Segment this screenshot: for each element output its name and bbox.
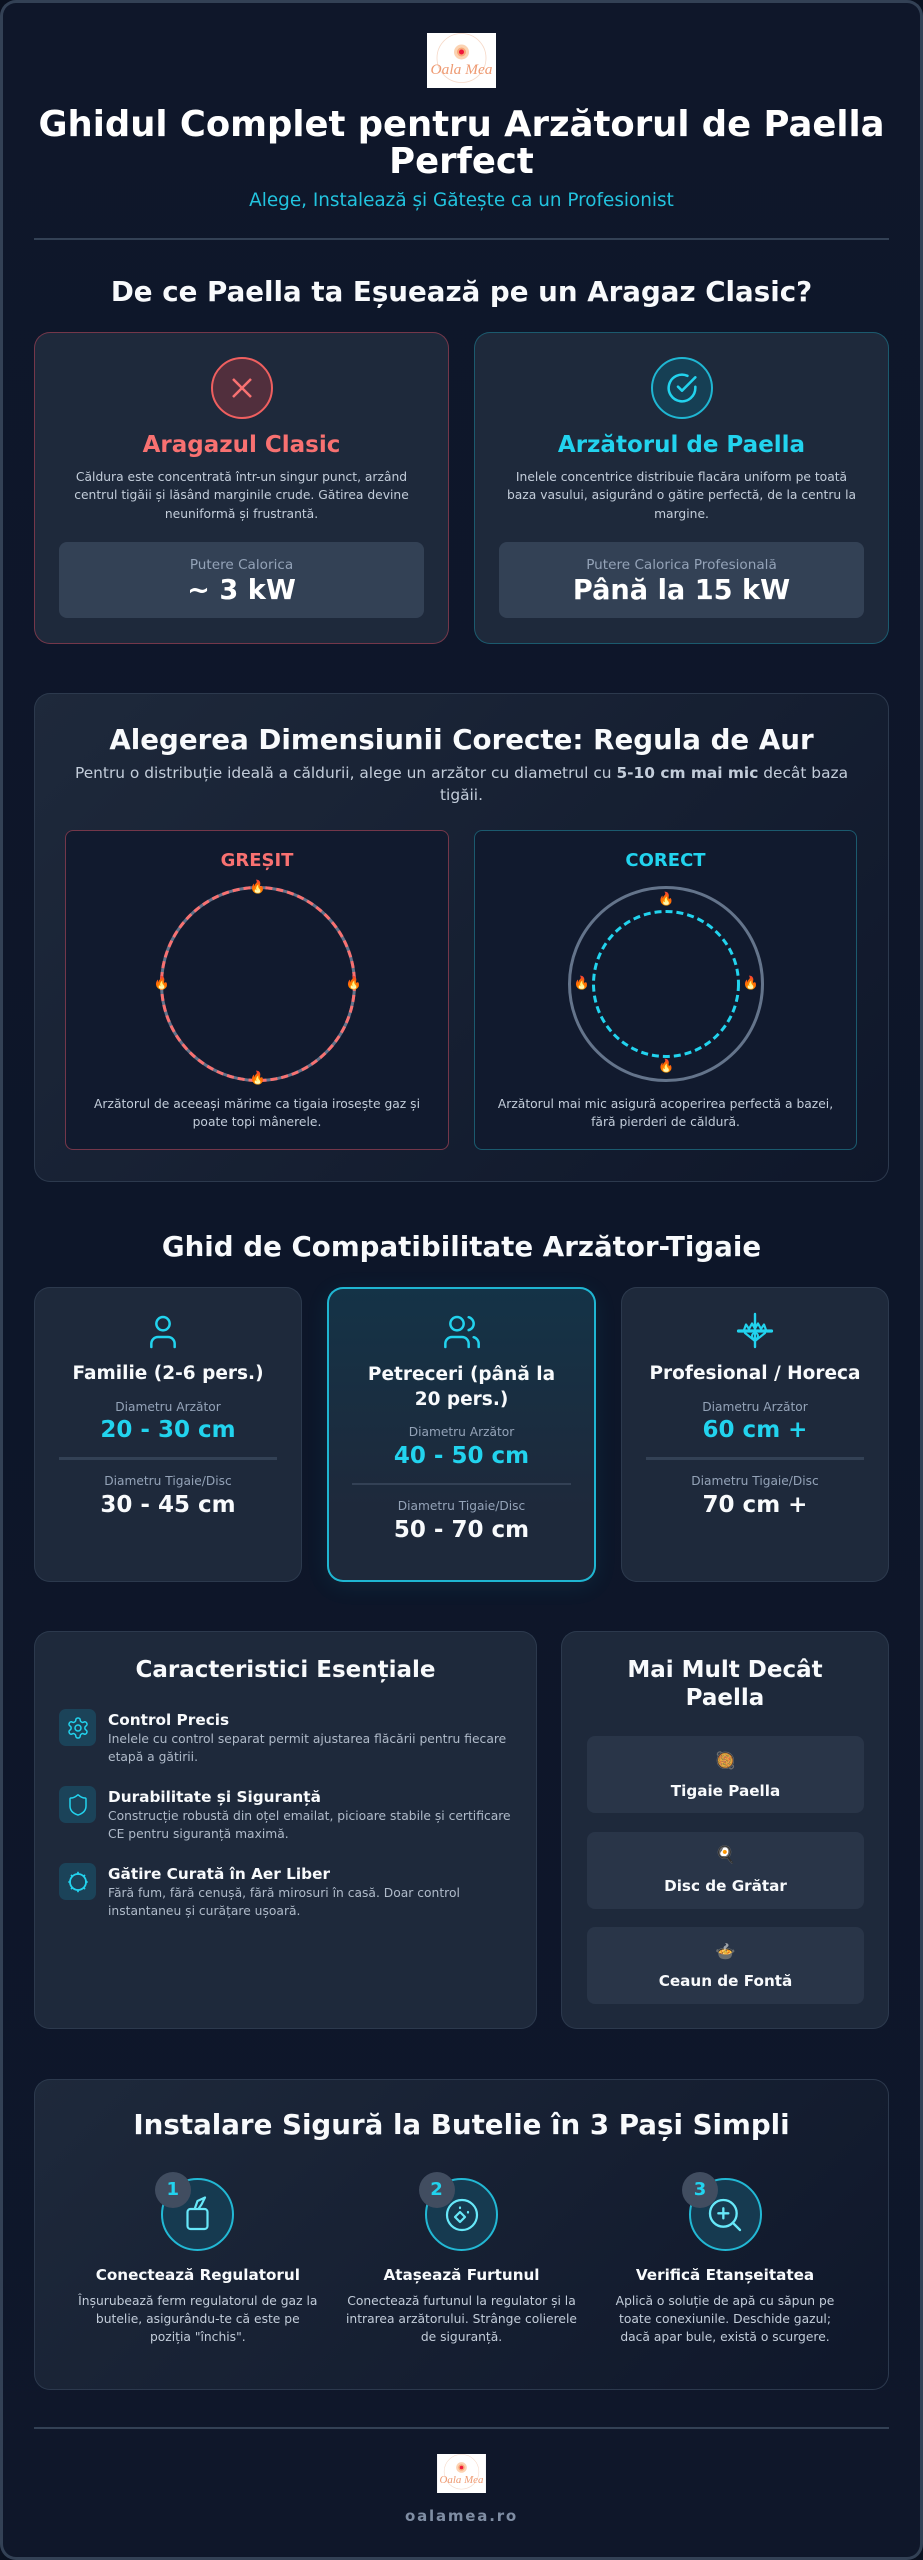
text: golden rule: Pentru o distribuție ideală a căldurii, alege un arzător cu diametrul cu 5-10 cm mai mic decât baza bbox=[75, 764, 848, 782]
diagram: same size burner: 🔥 bbox=[250, 1071, 265, 1086]
diagram: smaller burner: 🔥 bbox=[658, 1059, 674, 1074]
heading: compatibility guide: Ghid de Compatibilitate Arzător-Tigaie bbox=[162, 1230, 761, 1263]
description: classic stove bbox=[74, 470, 409, 521]
icon: shield bbox=[59, 1786, 96, 1823]
caption: correct bbox=[498, 1096, 833, 1129]
step text bbox=[346, 2294, 577, 2344]
logo: Oala Mea bbox=[427, 33, 496, 88]
feature text: durability bbox=[108, 1809, 511, 1841]
step title: Atașează Furtunul bbox=[383, 2266, 540, 2284]
logo: Oala Mea: Oala Mea bbox=[430, 62, 492, 78]
burner value: 40 - 50 cm bbox=[394, 1443, 529, 1469]
label: correct: CORECT bbox=[625, 850, 706, 871]
icon: hose bbox=[446, 2198, 478, 2232]
heading: why paella fails: De ce Paella ta Eșuează pe un Aragaz Clasic? bbox=[111, 275, 812, 308]
stat: classic power bbox=[59, 542, 424, 618]
step text: de siguranță. bbox=[421, 2330, 502, 2344]
pan diameter: Diametru Tigaie/Disc bbox=[398, 1499, 525, 1513]
step title: Conectează Regulatorul bbox=[96, 2266, 300, 2284]
caption: correct: Arzătorul mai mic asigură acoperirea perfectă a bazei, bbox=[498, 1096, 833, 1110]
description: classic stove: Căldura este concentrată într-un singur punct, arzând bbox=[76, 470, 407, 484]
icon: cross bbox=[211, 357, 273, 419]
feature text: control: Inelele cu control separat permit ajustarea flăcării pentru fiecare bbox=[108, 1732, 506, 1746]
diagram: smaller burner: 🔥 bbox=[743, 976, 758, 991]
item: cast iron pot: Ceaun de Fontă bbox=[659, 1972, 792, 1990]
pan diameter: Diametru Tigaie/Disc bbox=[104, 1474, 232, 1488]
description: paella burner: margine. bbox=[654, 507, 709, 521]
step text: butelie, asigurându-te că este pe bbox=[96, 2312, 300, 2326]
item: cast iron pot: 🍲 bbox=[715, 1942, 736, 1961]
card: parties bbox=[327, 1287, 596, 1582]
stat: classic power: Putere Calorica bbox=[190, 557, 293, 573]
badge 1: 1 bbox=[167, 2179, 179, 2200]
item: cast iron pot bbox=[587, 1927, 864, 2004]
panel: paella burner bbox=[474, 332, 889, 644]
diagram: same size burner bbox=[154, 880, 361, 1086]
panel: essential features bbox=[34, 1631, 537, 2029]
item: paella pan bbox=[587, 1736, 864, 1813]
card title: Familie (2-6 pers.) bbox=[72, 1362, 264, 1384]
diagram: same size burner: 🔥 bbox=[346, 976, 361, 991]
icon: professional burner bbox=[736, 1312, 774, 1348]
icon: clean air bbox=[59, 1863, 96, 1900]
text: golden rule: tigăii. bbox=[440, 786, 483, 804]
heading: paella burner: Arzătorul de Paella bbox=[558, 432, 805, 458]
footer logo bbox=[437, 2454, 486, 2493]
card title: Petreceri (până la bbox=[368, 1364, 555, 1384]
panel: golden rule bbox=[34, 693, 889, 1182]
description: paella burner bbox=[507, 470, 856, 521]
panel: correct size bbox=[474, 830, 857, 1150]
panel: safe installation bbox=[34, 2079, 889, 2390]
feature text: clean cooking bbox=[108, 1886, 460, 1918]
badge 2 bbox=[418, 2172, 454, 2208]
item: paella pan: Tigaie Paella bbox=[671, 1782, 780, 1800]
burner diameter: Diametru Arzător bbox=[702, 1400, 808, 1414]
description: paella burner: Inelele concentrice distribuie flacăra uniform pe toată bbox=[516, 470, 847, 484]
caption: wrong: Arzătorul de aceeași mărime ca tigaia irosește gaz și bbox=[94, 1096, 420, 1110]
step text bbox=[616, 2294, 834, 2344]
pan diameter: Diametru Tigaie/Disc bbox=[691, 1474, 819, 1488]
panel: more than paella bbox=[561, 1631, 889, 2029]
card: family bbox=[34, 1287, 302, 1582]
stat: classic power: ~ 3 kW bbox=[187, 575, 296, 606]
feature title: clean cooking: Gătire Curată în Aer Liber bbox=[108, 1865, 330, 1883]
diagram: same size burner: 🔥 bbox=[250, 880, 265, 895]
card title: 20 pers.) bbox=[415, 1388, 508, 1410]
feature text: clean cooking: instantaneu și curățare ușoară. bbox=[108, 1904, 300, 1918]
panel: wrong size bbox=[65, 830, 449, 1150]
title: Perfect bbox=[389, 141, 534, 182]
step text: poziția "închis". bbox=[150, 2330, 246, 2344]
heading: more than paella bbox=[627, 1657, 823, 1711]
diagram: smaller burner: 🔥 bbox=[658, 892, 674, 907]
heading: classic stove: Aragazul Clasic bbox=[143, 432, 340, 458]
icon: users bbox=[444, 1316, 480, 1348]
label: wrong: GREȘIT bbox=[221, 850, 293, 871]
pan value: 30 - 45 cm bbox=[100, 1492, 236, 1518]
diagram: smaller burner bbox=[568, 886, 764, 1082]
pan value: 50 - 70 cm bbox=[394, 1516, 529, 1542]
burner diameter: Diametru Arzător bbox=[115, 1400, 221, 1414]
subtitle: Alege, Instalează și Gătește ca un Profesionist bbox=[249, 190, 674, 211]
icon: regulator bbox=[186, 2196, 209, 2230]
burner value: 20 - 30 cm bbox=[100, 1417, 236, 1443]
stat: burner power bbox=[499, 542, 864, 618]
step text: intrarea arzătorului. Strânge colierele bbox=[346, 2312, 577, 2326]
caption: wrong bbox=[94, 1096, 420, 1129]
title: Ghidul Complet pentru Arzătorul de Paella bbox=[38, 104, 884, 145]
caption: wrong: poate topi mânerele. bbox=[193, 1115, 321, 1129]
step text: Înșurubează ferm regulatorul de gaz la bbox=[78, 2294, 317, 2308]
icon: check bbox=[651, 357, 713, 419]
heading: features: Caracteristici Esențiale bbox=[135, 1657, 436, 1683]
badge 3 bbox=[682, 2172, 718, 2208]
step text: dacă apar bule, există o scurgere. bbox=[620, 2330, 830, 2344]
caption: correct: fără pierderi de căldură. bbox=[591, 1115, 740, 1129]
step text: Aplică o soluție de apă cu săpun pe bbox=[616, 2294, 834, 2308]
item: grill disc: 🍳 bbox=[715, 1845, 736, 1864]
item: paella pan: 🥘 bbox=[715, 1751, 736, 1770]
title bbox=[38, 104, 884, 182]
description: classic stove: centrul tigăii și lăsând marginile crude. Gătirea devine bbox=[74, 488, 409, 502]
icon: user bbox=[150, 1316, 176, 1348]
badge 3: 3 bbox=[694, 2179, 706, 2200]
step 2 bbox=[346, 2172, 577, 2344]
step text bbox=[78, 2294, 317, 2344]
panel: classic stove bbox=[34, 332, 449, 644]
item: grill disc: Disc de Grătar bbox=[664, 1877, 787, 1895]
heading: more than paella: Mai Mult Decât bbox=[627, 1657, 823, 1683]
step 3 bbox=[616, 2172, 834, 2344]
heading: golden rule: Alegerea Dimensiunii Corecte: Regula de Aur bbox=[109, 723, 814, 756]
heading: installation: Instalare Sigură la Butelie în 3 Pași Simpli bbox=[133, 2108, 790, 2141]
card title bbox=[368, 1364, 555, 1410]
step 1 bbox=[78, 2172, 317, 2344]
icon: magnifier bbox=[708, 2198, 742, 2232]
footer logo: Oala Mea bbox=[440, 2475, 483, 2486]
feature text: durability: CE pentru siguranță maximă. bbox=[108, 1827, 289, 1841]
feature title: durability: Durabilitate și Siguranță bbox=[108, 1788, 321, 1806]
burner value: 60 cm + bbox=[703, 1417, 807, 1443]
diagram: same size burner: 🔥 bbox=[154, 976, 169, 991]
description: paella burner: baza vasului, asigurând o gătire perfectă, de la centru la bbox=[507, 488, 856, 502]
stat: burner power: Putere Calorica Profesională bbox=[586, 557, 777, 573]
diagram: smaller burner: 🔥 bbox=[574, 976, 589, 991]
description: classic stove: neuniformă și frustrantă. bbox=[165, 507, 318, 521]
stat: burner power: Până la 15 kW bbox=[573, 575, 790, 606]
text: golden rule bbox=[75, 764, 848, 804]
feature text: control: etapă a gătirii. bbox=[108, 1750, 198, 1764]
footer site name: oalamea.ro bbox=[405, 2507, 518, 2525]
badge 2: 2 bbox=[430, 2179, 443, 2200]
badge 1 bbox=[155, 2172, 191, 2208]
icon: gear bbox=[59, 1709, 96, 1746]
step text: Conectează furtunul la regulator și la bbox=[347, 2294, 576, 2308]
pan value: 70 cm + bbox=[703, 1492, 807, 1518]
item: grill disc bbox=[587, 1832, 864, 1909]
card: professional bbox=[621, 1287, 889, 1582]
burner diameter: Diametru Arzător bbox=[409, 1425, 514, 1439]
step text: toate conexiunile. Deschide gazul; bbox=[619, 2312, 831, 2326]
feature text: clean cooking: Fără fum, fără cenușă, fără mirosuri în casă. Doar control bbox=[108, 1886, 460, 1900]
card title: Profesional / Horeca bbox=[650, 1362, 860, 1384]
feature title: control: Control Precis bbox=[108, 1711, 229, 1729]
heading: more than paella: Paella bbox=[686, 1685, 764, 1711]
step title: Verifică Etanșeitatea bbox=[636, 2266, 814, 2284]
feature text: durability: Construcție robustă din oțel emailat, picioare stabile și certificare bbox=[108, 1809, 511, 1823]
feature text: control bbox=[108, 1732, 506, 1764]
